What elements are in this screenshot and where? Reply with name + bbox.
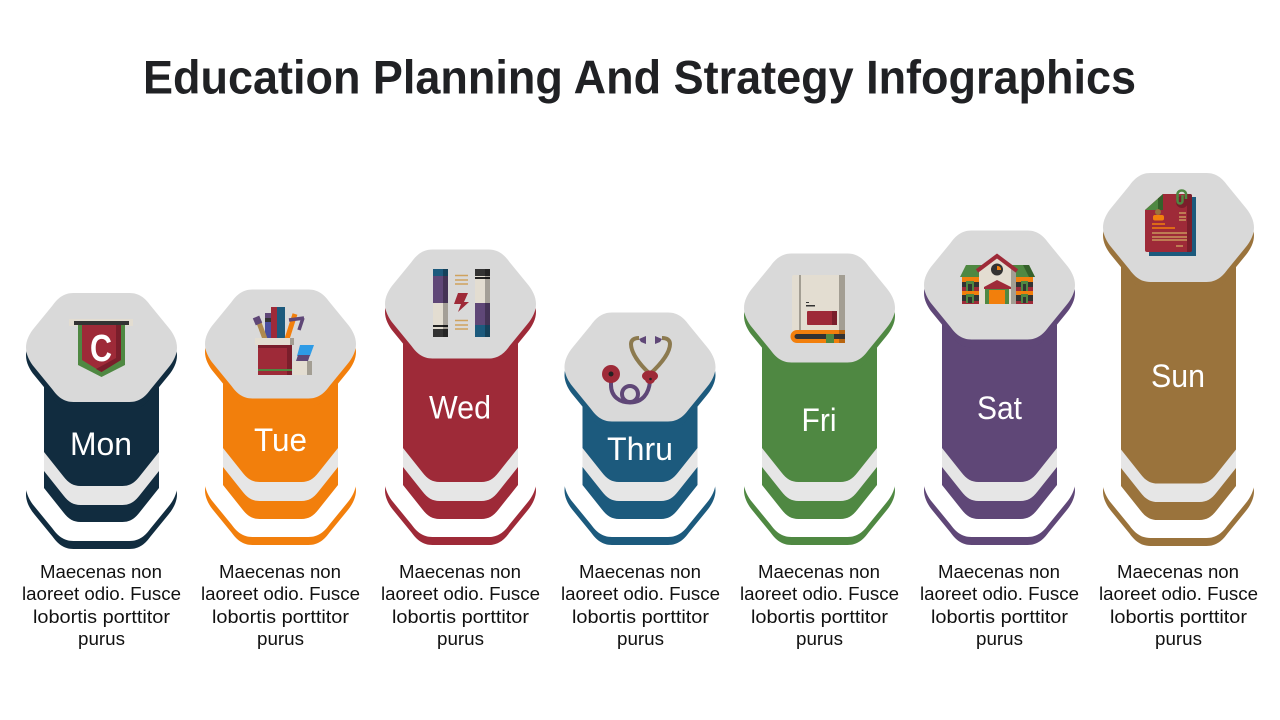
text block: Tue xyxy=(201,562,360,649)
text block: Mon: purus xyxy=(78,629,125,649)
panel: Thru xyxy=(561,312,720,649)
text block: Thru: lobortis porttitor xyxy=(572,607,709,627)
text block: Sun: purus xyxy=(1155,629,1202,649)
label: Sun: Sun xyxy=(1151,358,1205,394)
label: Mon: Mon xyxy=(70,426,132,462)
icon: pennant xyxy=(69,319,133,377)
icon: pennant: C xyxy=(90,328,112,370)
text block: Tue: Maecenas non xyxy=(219,562,341,582)
icon: stethoscope xyxy=(602,336,670,402)
panel: Wed xyxy=(381,250,540,649)
text block: Sat: purus xyxy=(976,629,1023,649)
text block: Tue: purus xyxy=(257,629,304,649)
panel: Sun xyxy=(1099,173,1258,649)
text block: Sun xyxy=(1099,562,1258,649)
panel: Sat xyxy=(920,230,1079,649)
pillar: Fri xyxy=(744,254,895,545)
text block: Mon: Maecenas non xyxy=(40,562,162,582)
text block: Sun: lobortis porttitor xyxy=(1110,607,1247,627)
text block: Sun: laoreet odio. Fusce xyxy=(1099,584,1258,604)
icon: school building xyxy=(960,256,1035,304)
label: Wed: Wed xyxy=(429,390,491,426)
text block: Fri: Maecenas non xyxy=(758,562,880,582)
icon: book xyxy=(790,275,845,343)
text block: Fri xyxy=(740,562,899,649)
pillar: Sun xyxy=(1103,173,1254,546)
icon: document with paperclip xyxy=(1145,190,1196,256)
icon: pencil cup xyxy=(255,307,314,375)
label: Tue: Tue xyxy=(254,422,307,458)
pillar: Wed xyxy=(385,250,536,545)
label: Sat: Sat xyxy=(977,390,1022,426)
text block: Tue: laoreet odio. Fusce xyxy=(201,584,360,604)
text block: Wed: laoreet odio. Fusce xyxy=(381,584,540,604)
label: Fri: Fri xyxy=(802,402,836,438)
text block: Thru: Maecenas non xyxy=(579,562,701,582)
text block: Sat: Maecenas non xyxy=(938,562,1060,582)
text block: Mon: lobortis porttitor xyxy=(33,607,170,627)
text block: Thru: purus xyxy=(617,629,664,649)
label: Thru: Thru xyxy=(607,431,673,467)
text block: Fri: purus xyxy=(796,629,843,649)
text block: Sat: laoreet odio. Fusce xyxy=(920,584,1079,604)
text block: Tue: lobortis porttitor xyxy=(212,607,349,627)
text block: Fri: laoreet odio. Fusce xyxy=(740,584,899,604)
icon: books and lightning xyxy=(433,269,490,337)
pillar: Thru xyxy=(564,312,716,545)
panel: Tue xyxy=(201,290,360,649)
panel: Fri xyxy=(740,254,899,649)
text block: Thru: laoreet odio. Fusce xyxy=(561,584,720,604)
text block: Wed: purus xyxy=(437,629,484,649)
text block: Mon xyxy=(22,562,181,649)
text block: Wed xyxy=(381,562,540,649)
pillar: Tue xyxy=(205,290,356,545)
text block: Sun: Maecenas non xyxy=(1117,562,1239,582)
pillar: Mon xyxy=(26,293,177,549)
title: Education Planning And Strategy Infographics xyxy=(143,50,1136,104)
text block: Thru xyxy=(561,562,720,649)
text block: Fri: lobortis porttitor xyxy=(751,607,888,627)
text block: Sat: lobortis porttitor xyxy=(931,607,1068,627)
panel: Mon xyxy=(22,293,181,649)
pillar: Sat xyxy=(924,230,1075,545)
text block: Mon: laoreet odio. Fusce xyxy=(22,584,181,604)
text block: Wed: Maecenas non xyxy=(399,562,521,582)
text block: Sat xyxy=(920,562,1079,649)
text block: Wed: lobortis porttitor xyxy=(392,607,529,627)
